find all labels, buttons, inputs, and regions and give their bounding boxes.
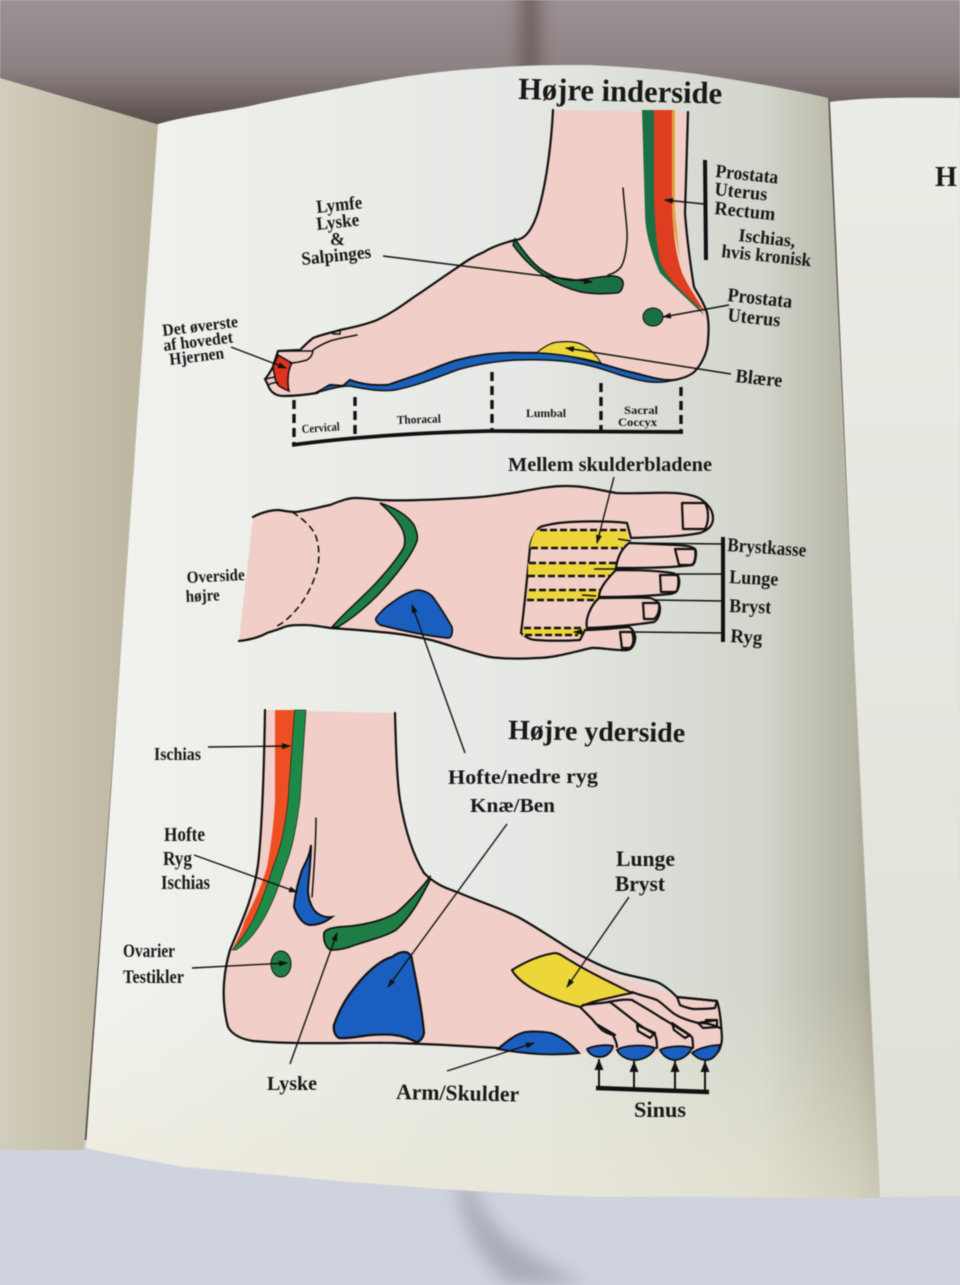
label: Ischias, hvis kronisk: [720, 226, 813, 271]
label: Lymfe Lyske & Salpinges: Lyske: [315, 211, 360, 235]
label: Blære: Blære: [734, 366, 784, 392]
label: Lunge Bryst: Lunge: [616, 846, 675, 871]
yellow zone: lung/chest: [512, 953, 632, 1007]
labels: Prostata Uterus Rectum: Rectum: [713, 198, 777, 225]
label: Lunge: Lunge: [729, 567, 779, 591]
label: Knæ/Ben: Knæ/Ben: [470, 795, 556, 817]
cloth top fold: [522, 0, 538, 75]
label: Overside højre: højre: [185, 585, 221, 606]
label: Lunge Bryst: [615, 846, 675, 896]
stripe: green: [232, 710, 306, 950]
yellow bump: blære: [535, 342, 601, 363]
foot outline: top view: [239, 486, 713, 659]
toe leader lines: [629, 543, 723, 633]
panel: top of right foot: [185, 454, 807, 753]
label: Prostata Uterus dot: [726, 285, 794, 332]
heading: Højre yderside: Højre yderside: [508, 715, 685, 749]
green band: top view: [332, 503, 417, 627]
label: Ovarier Testikler: [123, 942, 184, 988]
label: Lumbal: Lumbal: [526, 406, 567, 420]
stripe: green: [642, 110, 704, 315]
arrow: hip to triangle: [412, 605, 465, 753]
label: Det øverste af hovedet Hjernen: [161, 312, 239, 369]
left blank page: [0, 78, 160, 1150]
labels: Prostata Uterus Rectum: Uterus: [713, 179, 768, 206]
panel: outer side of right foot: [123, 710, 722, 1122]
arrow: Mellem skulderbladene: [597, 477, 614, 543]
label: Lymfe Lyske & Salpinges: Lymfe: [315, 193, 363, 218]
labels: Prostata Uterus Rectum: [713, 161, 780, 225]
green dot: prostata: [643, 308, 663, 326]
label: Lymfe Lyske & Salpinges: [300, 193, 372, 270]
label: Det øverste af hovedet Hjernen: Hjernen: [168, 343, 226, 369]
stripe: red: [654, 110, 705, 312]
labels: Prostata Uterus Rectum: Prostata: [714, 161, 780, 189]
label: Bryst: Bryst: [729, 596, 772, 618]
green oval: ovarier: [271, 951, 291, 977]
label: Prostata Uterus dot: Prostata: [726, 285, 794, 313]
label: Sinus: Sinus: [634, 1097, 686, 1122]
arrow: Ischias: [208, 746, 290, 747]
arrow: Lyske: [290, 933, 337, 1064]
stripe: yellow: [672, 110, 680, 260]
label: Ischias, hvis kronisk: hvis kronisk: [720, 242, 813, 271]
big toe: red zone: [273, 355, 292, 391]
vertical bar: right labels: [705, 160, 706, 260]
arrow: Ovarier Testikler: [192, 963, 287, 968]
blue sole strip: [315, 353, 674, 393]
right neighbouring page: [830, 98, 960, 1197]
panel: inner side of right foot: [161, 71, 813, 445]
right neighbouring page: H: [935, 162, 957, 193]
toes lines: [265, 330, 357, 385]
thin ankle line with blue crescent: [294, 818, 332, 925]
label: Lunge Bryst: Bryst: [615, 871, 665, 896]
label: Brystkasse: Brystkasse: [727, 535, 807, 562]
background: cloth bottom: [0, 1140, 960, 1285]
foot upper edge: [253, 486, 713, 538]
small arrows in strips: [574, 539, 631, 632]
toes: outer: [580, 992, 720, 1048]
label: Prostata Uterus dot: Uterus: [726, 305, 782, 332]
cloth bottom fold: [458, 1185, 590, 1285]
green band: lymph: [513, 239, 623, 294]
label: Ischias, hvis kronisk: Ischias,: [737, 226, 796, 252]
label: Hofte/nedre ryg: Hofte/nedre ryg: [448, 766, 599, 789]
arrow: to red stripe: [665, 200, 704, 204]
arrow: brain: [231, 347, 286, 368]
label: Thoracal: Thoracal: [397, 411, 442, 427]
heading: Højre inderside: Højre inderside: [518, 71, 723, 111]
main page: [86, 65, 880, 1198]
vertical bar: toe labels: [721, 537, 725, 642]
toes: top view: [585, 543, 696, 650]
label: Det øverste af hovedet Hjernen: Det øverste: [161, 312, 239, 340]
stripe: red: [232, 710, 294, 950]
label: Ovarier Testikler: Testikler: [123, 968, 184, 988]
dashed ankle arc: [275, 512, 319, 627]
label: Cervical: Cervical: [301, 419, 341, 436]
thin ankle line: [608, 188, 627, 275]
label: Ovarier Testikler: Ovarier: [123, 942, 175, 962]
green band: outer: [324, 877, 430, 950]
arrow: Knæ/Ben: [388, 824, 507, 987]
label: Hofte Ryg Ischias: Hofte: [164, 825, 205, 846]
label: Ryg: Ryg: [730, 626, 763, 649]
label: Coccyx: Coccyx: [618, 415, 657, 429]
label: Hofte Ryg Ischias: [161, 825, 210, 894]
blue triangle: hip/lower back: [376, 590, 452, 638]
blue pads: sinus toes: [587, 1045, 720, 1060]
arrow: Hofte Ryg Ischias: [194, 855, 297, 892]
bracket: Sinus arrows: [596, 1059, 709, 1092]
toe nails: [620, 503, 708, 648]
label: Lymfe Lyske & Salpinges: &: [330, 229, 345, 249]
blue pad: arm/shoulder: [498, 1032, 579, 1054]
blue zone: knee/leg: [334, 952, 424, 1042]
label: Mellem skulderbladene: Mellem skulderbladene: [508, 454, 712, 476]
label: Ischias: Ischias: [154, 744, 201, 764]
arrow: lymph: [383, 256, 592, 282]
foot outline: outer side: [224, 710, 722, 1055]
label: Sacral: Sacral: [624, 403, 659, 417]
bracket: spine zones: [292, 372, 683, 445]
label: Det øverste af hovedet Hjernen: af hovedet: [162, 328, 234, 355]
label: Overside højre: Overside: [186, 565, 246, 587]
label: Hofte Ryg Ischias: Ischias: [161, 873, 210, 894]
label: Lyske: Lyske: [267, 1073, 317, 1095]
arrow: blære: [566, 348, 731, 374]
arrow: Lunge Bryst: [567, 897, 629, 987]
foot lower edge: [239, 625, 635, 659]
label: Lymfe Lyske & Salpinges: Salpinges: [300, 243, 372, 270]
foot outline: inner side: [265, 110, 709, 396]
plate: yellow strips: [521, 521, 631, 641]
arrow: Arm/Skulder: [447, 1043, 534, 1071]
label: Overside højre: [185, 565, 246, 606]
label: Hofte Ryg Ischias: Ryg: [163, 849, 192, 870]
label: Arm/Skulder: Arm/Skulder: [396, 1079, 520, 1107]
foot line: leg and heel and top: [224, 710, 722, 1053]
arrow: prostata dot: [663, 305, 729, 317]
